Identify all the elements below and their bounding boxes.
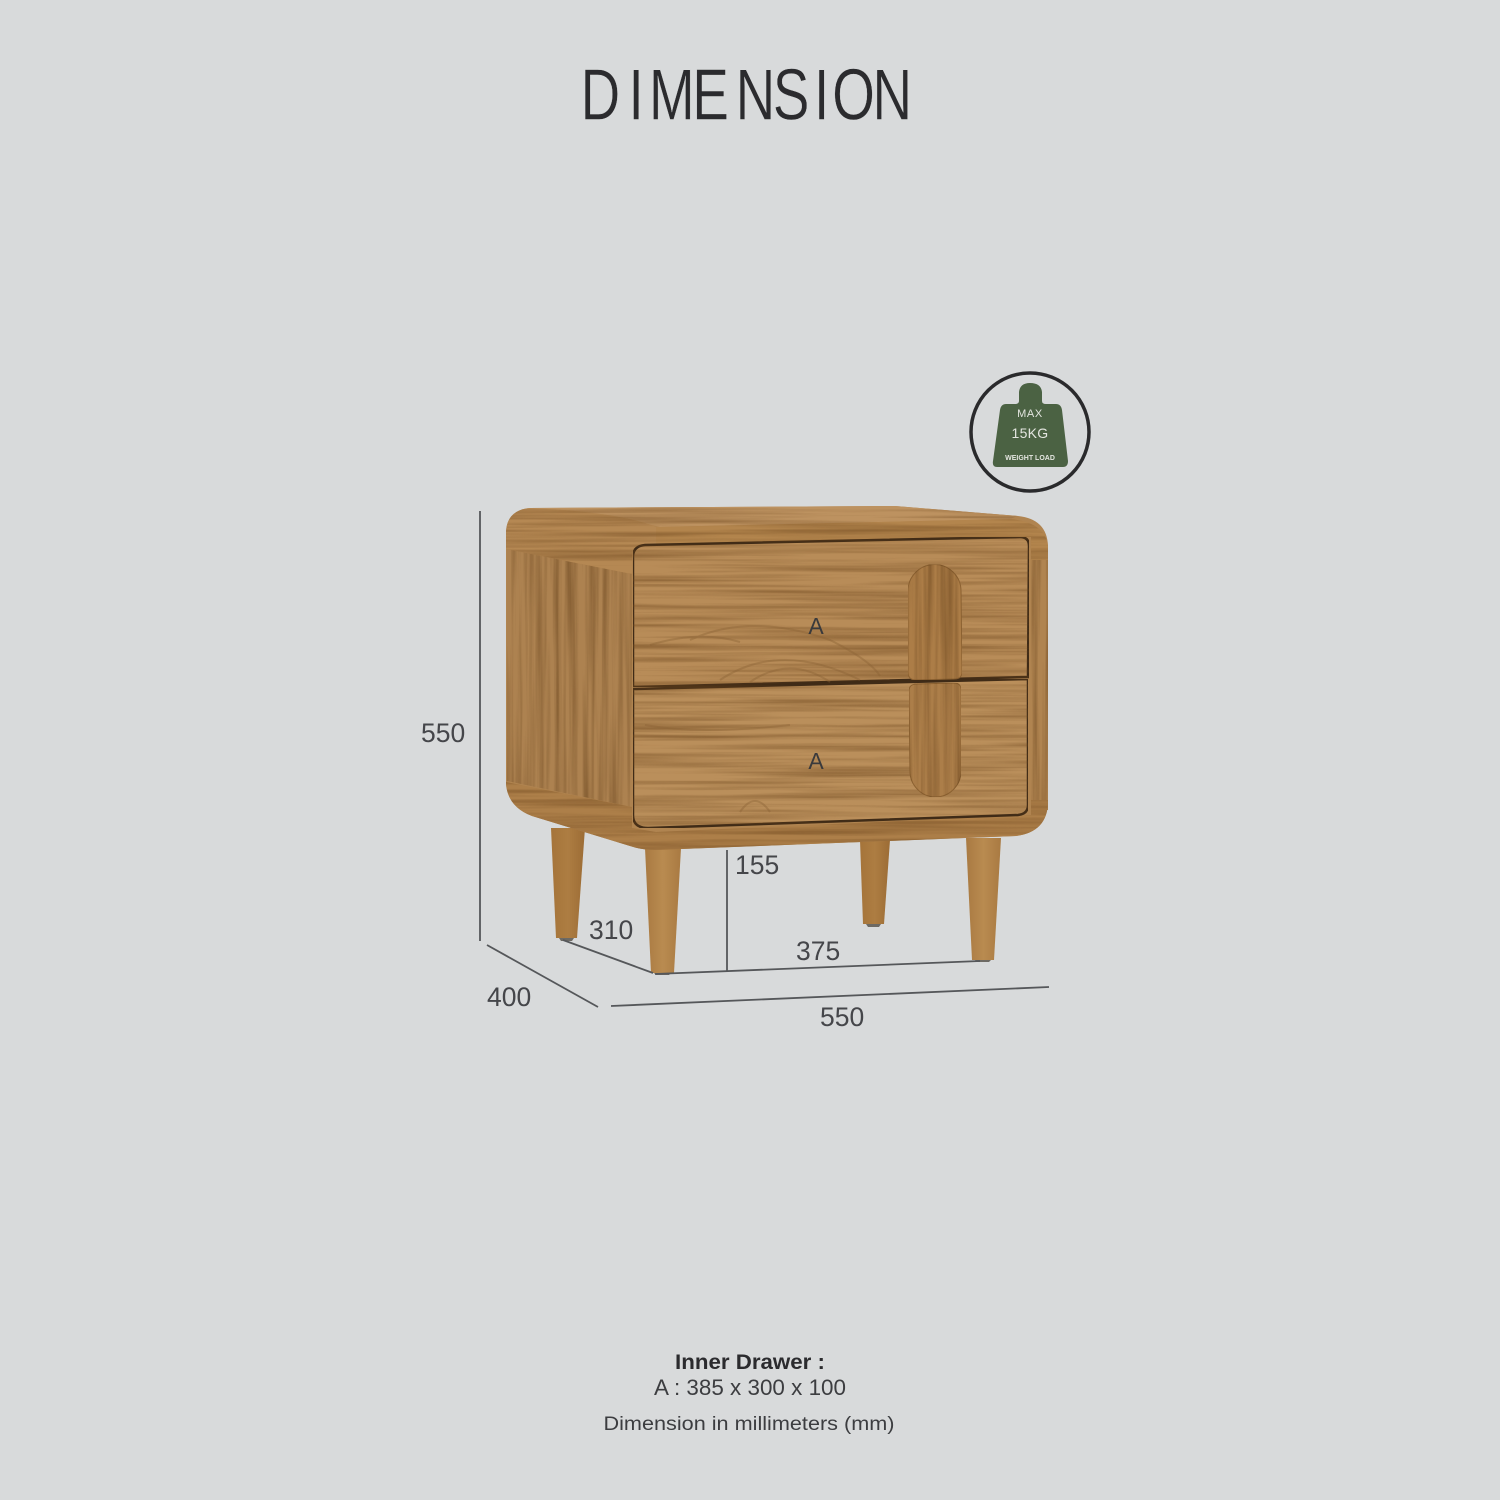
lower drawer front (633, 679, 1028, 828)
units note: Dimension in millimeters (mm) (604, 1413, 894, 1435)
badge ring (971, 373, 1089, 491)
title: DIMENSION (581, 54, 912, 135)
icon: max weight load badge (971, 373, 1089, 491)
drawer label: lower: A (808, 748, 824, 774)
label: width 550: 550 (820, 1002, 864, 1032)
badge text: weight load: WEIGHT LOAD (1005, 455, 1055, 462)
upper drawer front (633, 537, 1029, 687)
drawer size: A : 385 x 300 x 100 (654, 1375, 846, 1400)
inner drawer notes (604, 1350, 894, 1435)
note heading: Inner Drawer : (675, 1350, 825, 1374)
leg depth line (563, 940, 653, 973)
front right leg (966, 838, 1001, 960)
drawer handle: lower (909, 683, 961, 797)
width line (611, 987, 1049, 1006)
badge text: max: MAX (1017, 408, 1043, 420)
leg span line (655, 961, 980, 974)
weight silhouette (993, 383, 1068, 467)
bottom left corner band (506, 782, 656, 850)
cabinet body silhouette (506, 506, 1048, 850)
label: height 550: 550 (421, 718, 465, 748)
label: leg depth 310: 310 (589, 915, 633, 945)
foot caps (559, 924, 991, 975)
cathedral grain detail (645, 626, 880, 812)
bedside table (506, 506, 1048, 975)
rear right leg (860, 840, 890, 924)
front right stile (1031, 560, 1048, 810)
top surface (530, 506, 1018, 527)
depth line (487, 945, 598, 1007)
dimension labels (421, 718, 864, 1032)
front bottom rail (656, 800, 1048, 850)
label: depth 400: 400 (487, 982, 531, 1012)
label: leg height 155: 155 (735, 850, 779, 880)
left side panel (507, 549, 632, 807)
front top rail (656, 519, 1048, 568)
height line (479, 511, 481, 941)
front left leg (645, 848, 681, 973)
leg height line (726, 850, 728, 972)
label: leg span 375: 375 (796, 936, 840, 966)
drawer handle: upper (908, 564, 962, 680)
badge text: 15kg: 15KG (1012, 425, 1048, 441)
drawer label: upper: A (808, 613, 824, 639)
rear left leg (551, 828, 585, 938)
dimension lines (480, 511, 1049, 1007)
top left corner band (506, 508, 656, 574)
